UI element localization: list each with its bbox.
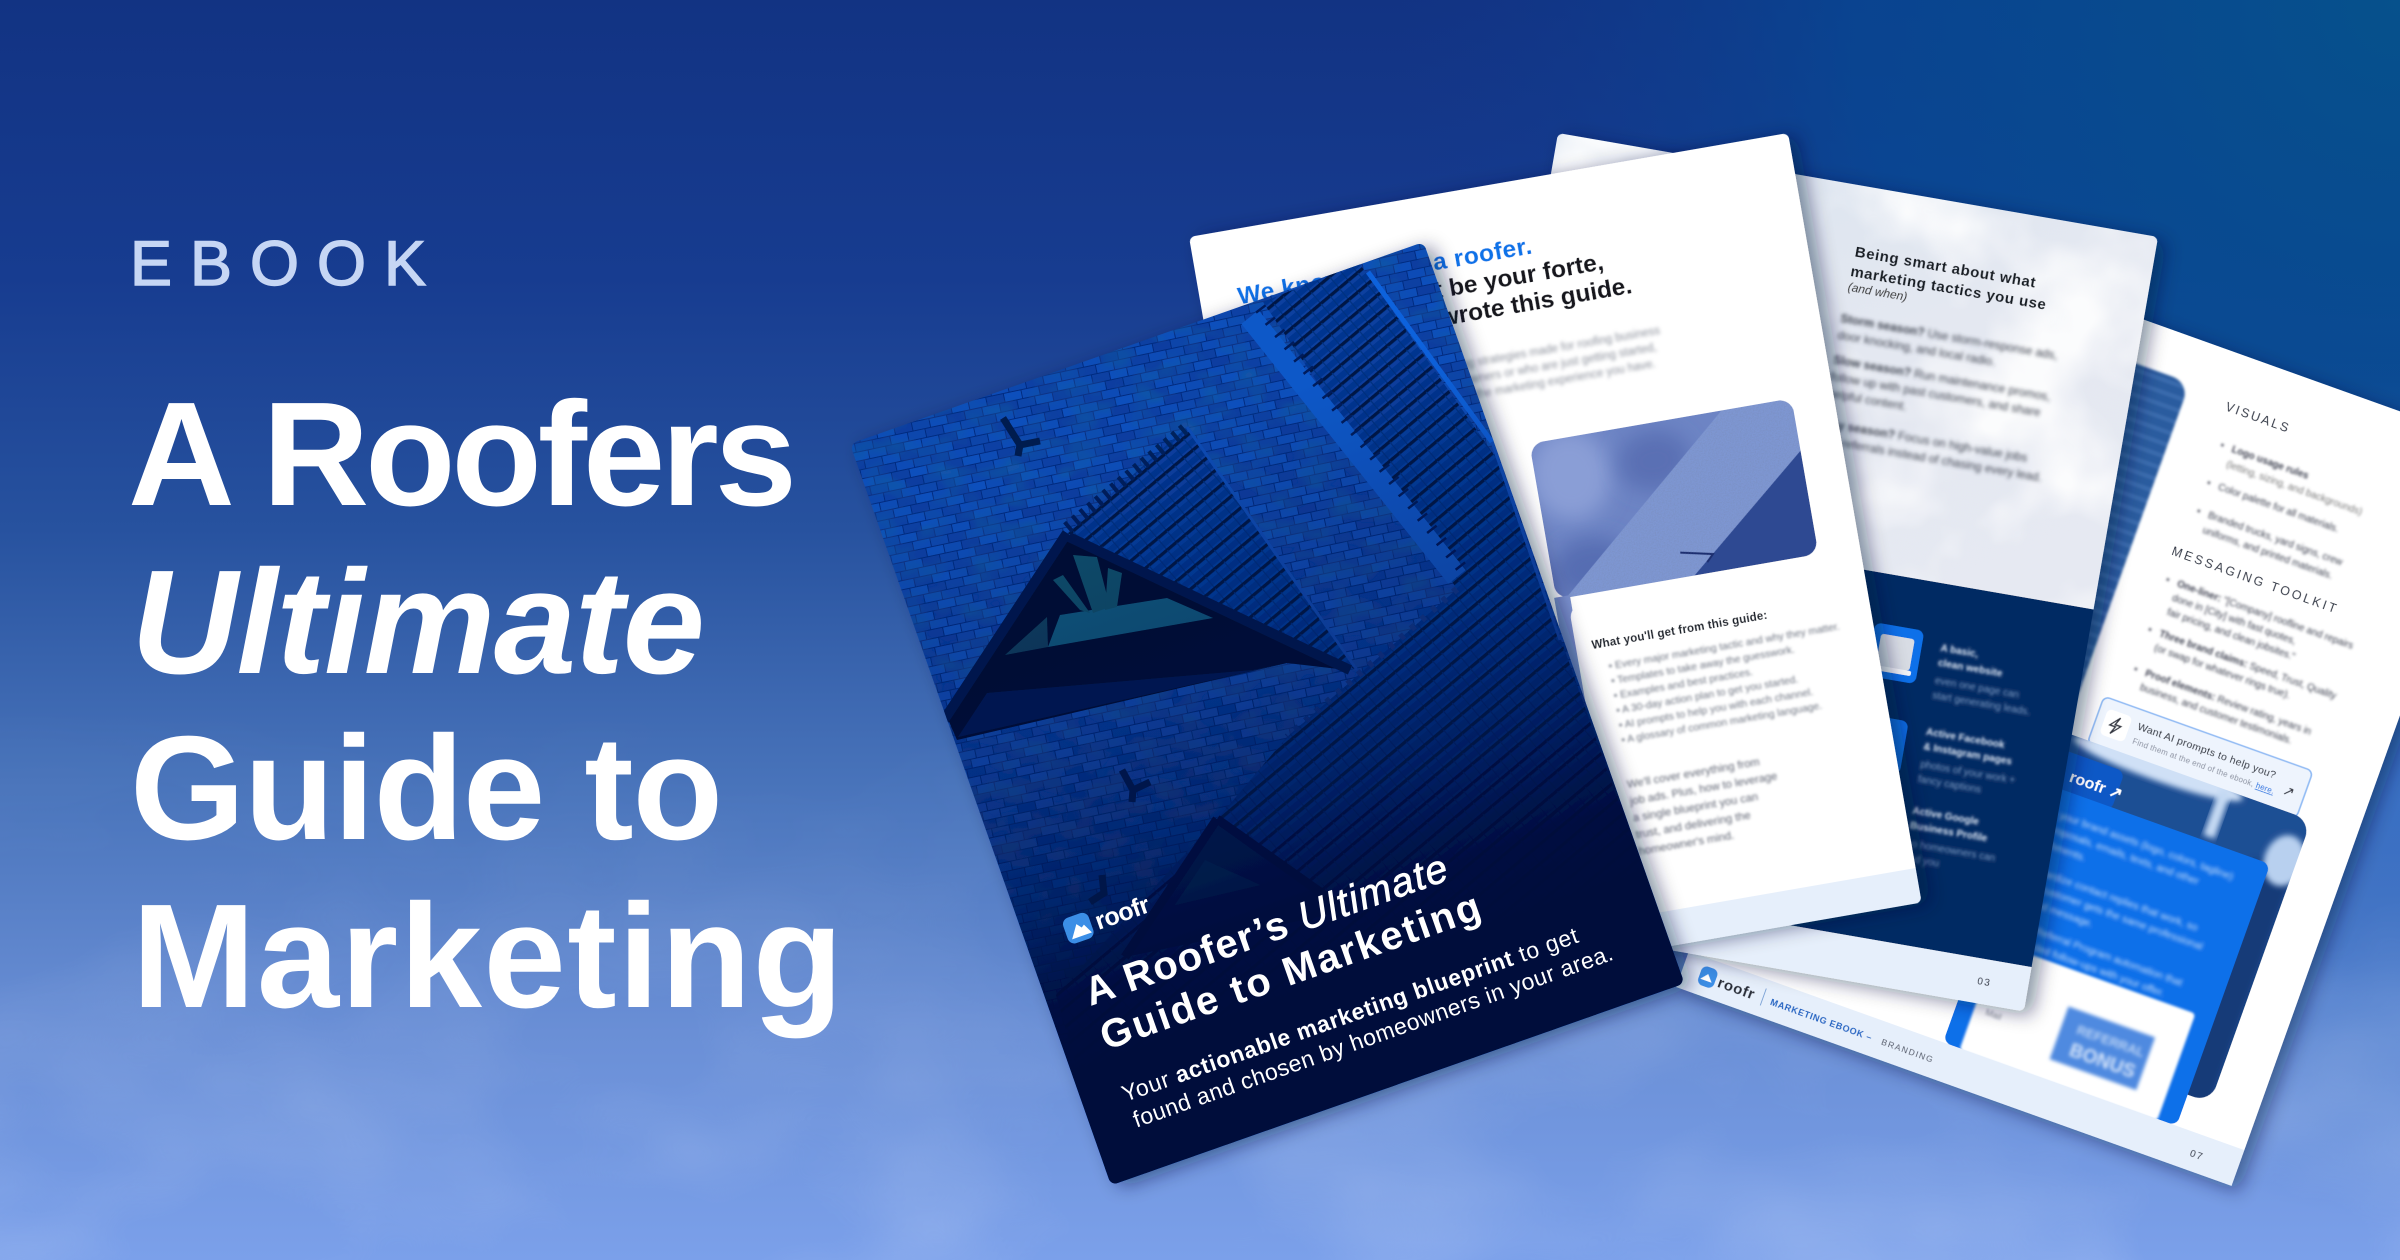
tag: roofr: [2028, 742, 2130, 813]
navy checklist panel: A basic,: [1940, 643, 1979, 660]
icon: laptop: [1866, 622, 1924, 684]
navy checklist panel: photos of your work +: [1920, 759, 2016, 786]
ebook cover: [852, 236, 1702, 1196]
title: Guide to: [130, 706, 723, 871]
blue card: referral program: on proposals, emails, texts, and other: [2032, 818, 2201, 888]
photo sliver left of card: [1554, 595, 1589, 706]
image panel: blurred office: [2068, 734, 2307, 1098]
blue card: referral program: [1942, 781, 2270, 1128]
blurred paragraph: a single blueprint you can: [1632, 791, 1759, 825]
blurred paragraph: trust, and delivering the: [1635, 810, 1752, 841]
cover title: A Roofer’s Ultimate: [1079, 846, 1454, 1015]
dark fade: [901, 379, 1683, 1184]
navy checklist panel: find you: [1903, 853, 1940, 870]
blurred tactics text: and referrals instead of chasing every lead.: [1818, 432, 2043, 485]
screenshot: referral bonus: [1959, 943, 2195, 1121]
blue card: referral program: every customer gets the same professional: [2012, 874, 2205, 953]
shingled right slope: [1056, 263, 1684, 1186]
blurred intro: [1419, 325, 1667, 410]
blurred tactics text: door knocking, and local radio.: [1836, 328, 1997, 369]
rooftop artwork: [852, 236, 1702, 1196]
title: Marketing: [132, 874, 843, 1039]
footer strip: BRANDING: [1880, 1037, 1934, 1064]
heading: visuals: VISUALS: [2224, 400, 2293, 436]
blurred list: • AI prompts to help you with each channel.: [1618, 687, 1814, 732]
blurred paragraph: We'll cover everything from: [1626, 756, 1761, 791]
cover title: Guide to Marketing: [1094, 885, 1486, 1059]
heading: [1847, 243, 2051, 327]
messaging bullet list: fair pricing, and clean jobsites.": [2165, 607, 2297, 663]
tag: roofr: roofr ↗: [2067, 769, 2125, 804]
heading: Marketing might not be your forte,: [1209, 249, 1606, 343]
messaging bullet list: •: [2164, 575, 2172, 586]
navy checklist panel: Business Profile: [1909, 820, 1988, 845]
messaging bullet list: [2127, 575, 2356, 756]
heading: We know you're a roofer.: [1236, 233, 1534, 310]
page number: 03: [1976, 976, 1992, 989]
messaging bullet list: (or swap for whatever rings true).: [2152, 643, 2292, 702]
visuals bullet list: Logo usage rules: [2230, 444, 2311, 482]
footer strip: 07: [2188, 1148, 2205, 1163]
main dormer: [944, 427, 1357, 740]
icon: lightning: [2099, 708, 2133, 743]
icon: map: [1834, 804, 1893, 865]
footer strip: [1317, 868, 1922, 1006]
heading: That's why we wrote this guide.: [1268, 272, 1634, 361]
blue card: referral program: tone and message.: [2007, 889, 2095, 930]
visuals bullet list: •: [2219, 440, 2226, 452]
footer strip: [1676, 951, 2244, 1186]
blurred paragraph: job ads. Plus, how to leverage: [1628, 770, 1778, 808]
visuals bullet list: •: [2205, 478, 2213, 490]
card: what you'll get: [1569, 555, 1921, 950]
blurred list: • Examples and best practices.: [1613, 667, 1754, 702]
icon: arrow: ↗: [2281, 782, 2297, 801]
visuals bullet list: [2190, 440, 2369, 584]
callout: AI prompts: Want AI prompts to help you?: [2136, 721, 2278, 781]
navy checklist panel: even one page can: [1934, 675, 2020, 701]
blurred intro: owners or who are just getting started,: [1464, 342, 1658, 387]
visuals bullet list: uniforms, and printed materials.: [2201, 525, 2334, 582]
icon: social: [1850, 713, 1909, 775]
logo: roofr: roofr: [1715, 974, 1757, 1003]
blurred tactics text: follow up with past customers, and share: [1829, 369, 2042, 419]
photo: roof edge: [1531, 400, 1817, 598]
heading: marketing tactics you use: [1849, 263, 2047, 314]
screenshot: referral bonus: Only: [1989, 992, 2011, 1008]
navy checklist panel: Active Facebook: [1925, 727, 2006, 751]
screenshot: referral bonus: REFERRAL: [2075, 1022, 2147, 1060]
heading: messaging toolkit: MESSAGING TOOLKIT: [2170, 544, 2341, 617]
blurred intro: Marketing strategies made for roofing business: [1423, 325, 1661, 378]
visuals bullet list: Color palette for all materials.: [2216, 482, 2340, 535]
page 03: marketing tactics: [1550, 134, 2170, 1026]
screenshot: referral bonus: BONUS: [2066, 1040, 2138, 1083]
blue card: referral program: Standardize contact replies that work, so: [2017, 859, 2200, 934]
visuals bullet list: •: [2195, 506, 2203, 518]
blue card: referral program: has branded follow-ups with your offer.: [1993, 928, 2166, 999]
image panel: roof column: [1791, 288, 2190, 759]
blurred paragraph: homeowner's mind.: [1638, 830, 1735, 858]
blurred list: • Templates to take away the guesswork.: [1610, 645, 1796, 687]
navy checklist panel: [1431, 505, 2094, 967]
navy checklist panel: & Instagram pages: [1923, 742, 2013, 768]
screenshot: referral bonus: Mail: [1984, 1007, 2003, 1022]
navy checklist panel: Active Google: [1912, 806, 1980, 828]
lower dormer: [1125, 819, 1347, 957]
navy checklist panel: fancy captions: [1917, 774, 1982, 796]
blue card: referral program: Make a Referral Program automation that: [1998, 913, 2184, 989]
blue card: referral program: Use your brand assets (logo, colors, tagline): [2038, 802, 2235, 883]
page 07: branding spread: [1676, 247, 2400, 1186]
title: [128, 372, 843, 1039]
hip ridge: [1250, 317, 1457, 577]
title: A Roofers: [128, 372, 797, 537]
blurred tactics text: helpful content.: [1826, 386, 1908, 413]
callout: AI prompts: [2087, 696, 2313, 818]
page: why we wrote this guide: [1189, 133, 1922, 1006]
blurred tactics text: [1818, 311, 2064, 485]
messaging bullet list: One-liner: "[Company] roofline and repairs: [2175, 579, 2355, 652]
messaging bullet list: •: [2132, 664, 2140, 676]
navy checklist panel: so homeowners can: [1906, 838, 1996, 864]
visuals bullet list: Branded trucks, yard signs, crew: [2206, 510, 2345, 569]
screenshot: referral bonus: Plans: [2000, 962, 2025, 979]
navy checklist panel: start generating leads.: [1931, 690, 2031, 718]
blurred paragraph: [1625, 754, 1787, 858]
blurred tactics text: Slow season? Run maintenance promos,: [1832, 352, 2052, 404]
logo: roofr: roofr: [1091, 891, 1154, 936]
heading: (and when): [1847, 280, 1908, 304]
blurred list: • A 30-day action plan to get you started.: [1616, 674, 1799, 717]
heading: [1205, 217, 1634, 371]
title: Ultimate: [131, 540, 705, 705]
card heading: What you'll get from this guide:: [1591, 610, 1768, 652]
blurred list: • A glossary of common marketing language.: [1621, 701, 1823, 746]
messaging bullet list: done in [City] with fast quotes,: [2170, 593, 2297, 647]
blurred list: • Every major marketing tactic and why they matter.: [1608, 622, 1840, 672]
callout: AI prompts: Find them at the end of the ebook, here.: [2131, 737, 2275, 796]
footer strip: MARKETING EBOOK –: [1769, 997, 1873, 1043]
cloud photo area: [1493, 133, 2158, 609]
messaging bullet list: •: [2146, 625, 2154, 636]
visuals bullet list: (letting, sizing, and backgrounds): [2225, 459, 2364, 518]
navy checklist panel: clean website: [1937, 658, 2004, 680]
blue highlight edge: [1368, 272, 1492, 442]
blurred intro: no matter the marketing experience you have.: [1424, 358, 1657, 410]
messaging bullet list: Three brand claims: Speed, Trust, Quality: [2158, 629, 2338, 702]
logo: roofr: [1061, 891, 1154, 946]
heading: Being smart about what: [1854, 244, 2037, 292]
blue card: referral program: attachments.: [2027, 833, 2087, 864]
messaging bullet list: business, and customer testimonials.: [2138, 682, 2293, 747]
screenshot: referral bonus: Day: [1995, 977, 2014, 992]
cover text: [1060, 751, 1616, 1133]
messaging bullet list: Proof elements: Review rating, years in: [2143, 668, 2313, 738]
cover subtitle: Your actionable marketing blueprint to get: [1118, 922, 1582, 1107]
label: EBOOK: EBOOK: [130, 229, 426, 299]
blurred tactics text: Any season? Focus on high-value jobs: [1821, 416, 2029, 465]
cover subtitle: found and chosen by homeowners in your area.: [1129, 939, 1616, 1132]
roof vents: [1003, 418, 1150, 902]
blurred list: [1608, 622, 1853, 746]
logo: roofr: [1696, 965, 1758, 1003]
blurred tactics text: Storm season? Use storm-response ads,: [1839, 311, 2059, 362]
